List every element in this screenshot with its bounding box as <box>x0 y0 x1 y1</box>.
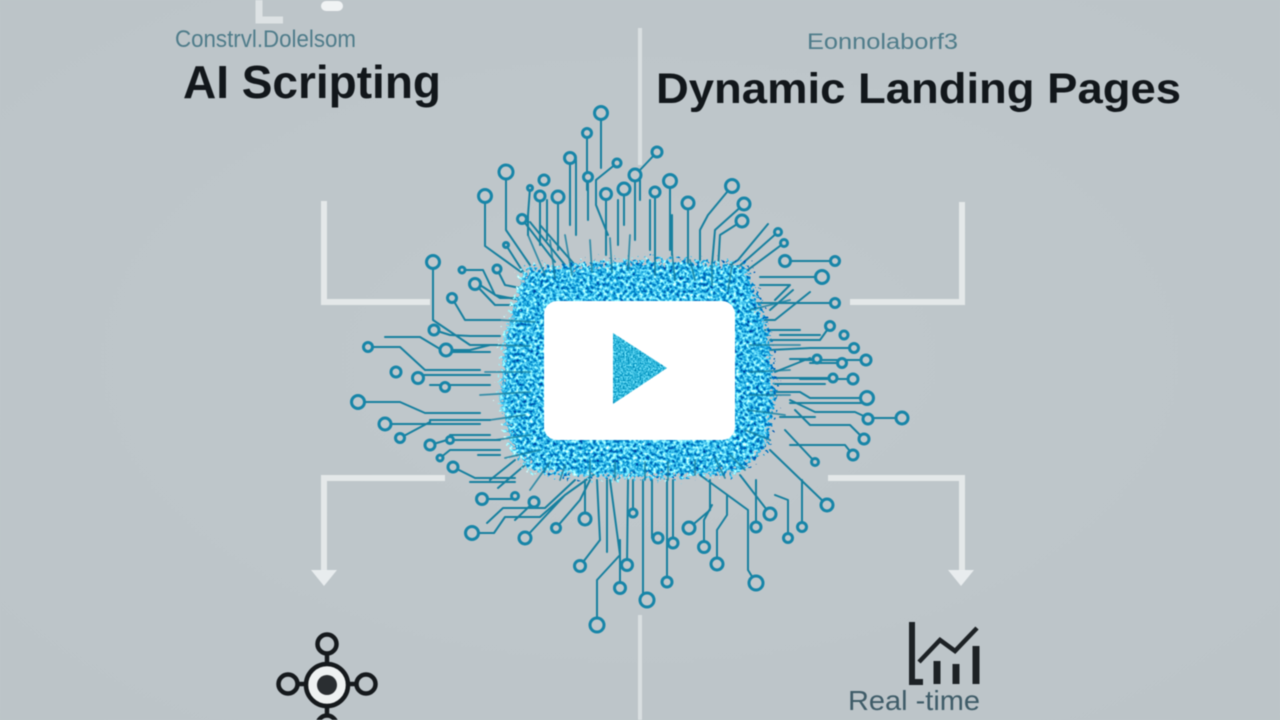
arrow: lower left <box>311 478 445 586</box>
circuit traces <box>358 113 902 625</box>
icon: line and bar chart <box>912 622 977 684</box>
left caption: Constrvl.Dolelsom <box>175 26 356 53</box>
connector: top centre vertical line <box>638 28 642 165</box>
label: Real-time: Real -time <box>848 685 980 716</box>
connector: bottom centre vertical line <box>638 615 642 720</box>
right caption: Eonnolaborf3 <box>807 29 958 54</box>
circuit chip: speckled core <box>500 261 775 477</box>
connector: upper right bracket <box>850 202 962 302</box>
arrow: lower right <box>828 478 974 586</box>
connector: top-edge bracket fragment <box>259 0 338 20</box>
circuit nodes <box>352 106 908 632</box>
heading: AI Scripting: AI Scripting <box>183 56 441 108</box>
video play panel <box>544 301 735 440</box>
connector: upper left bracket <box>324 201 430 302</box>
play triangle <box>613 333 667 404</box>
inner traces fading into the core <box>480 235 800 490</box>
heading: Dynamic Landing Pages: Dynamic Landing Pages <box>656 65 1181 113</box>
icon: hub network <box>278 634 376 720</box>
